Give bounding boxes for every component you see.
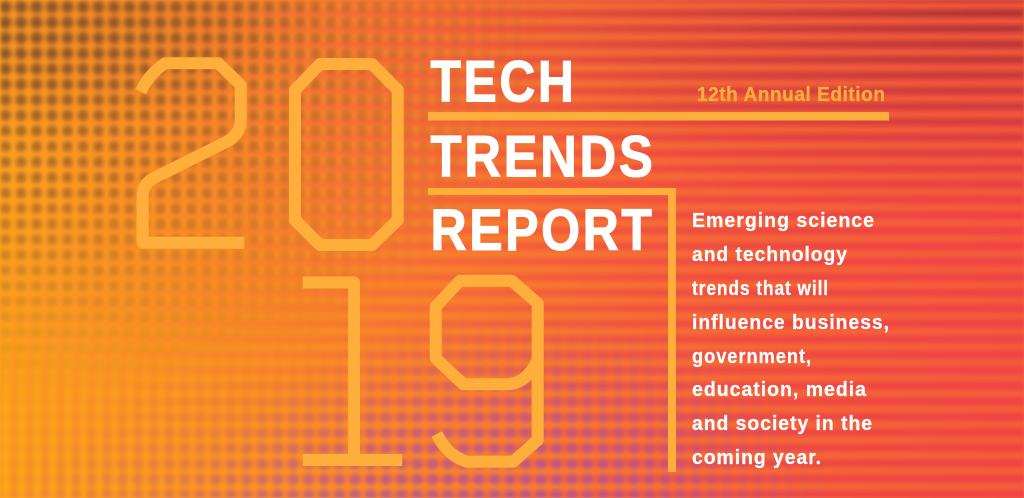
title: Tech Trends Report bbox=[430, 50, 656, 263]
large year numerals 2019 bbox=[141, 63, 538, 462]
bracket rule around REPORT bbox=[428, 188, 676, 472]
numeral 0 bbox=[295, 64, 398, 245]
description text: Emerging science bbox=[692, 210, 875, 232]
description text: and society in the bbox=[692, 413, 873, 435]
description text: influence business, bbox=[692, 312, 890, 334]
title line: REPORT: REPORT bbox=[430, 198, 654, 263]
title line: TECH: TECH bbox=[430, 50, 576, 114]
description text: education, media bbox=[692, 379, 867, 401]
title line: TRENDS: TRENDS bbox=[430, 124, 656, 190]
description text: and technology bbox=[692, 244, 848, 266]
description text bbox=[692, 210, 890, 469]
numeral 2 bbox=[141, 63, 244, 243]
edition label: 12th Annual Edition bbox=[697, 83, 886, 106]
numeral 9 bbox=[436, 281, 538, 462]
description text: government, bbox=[692, 346, 812, 368]
rule under TECH bbox=[428, 112, 889, 120]
numeral 1 bbox=[303, 282, 402, 460]
description text: trends that will bbox=[692, 278, 829, 300]
description text: coming year. bbox=[692, 447, 822, 469]
